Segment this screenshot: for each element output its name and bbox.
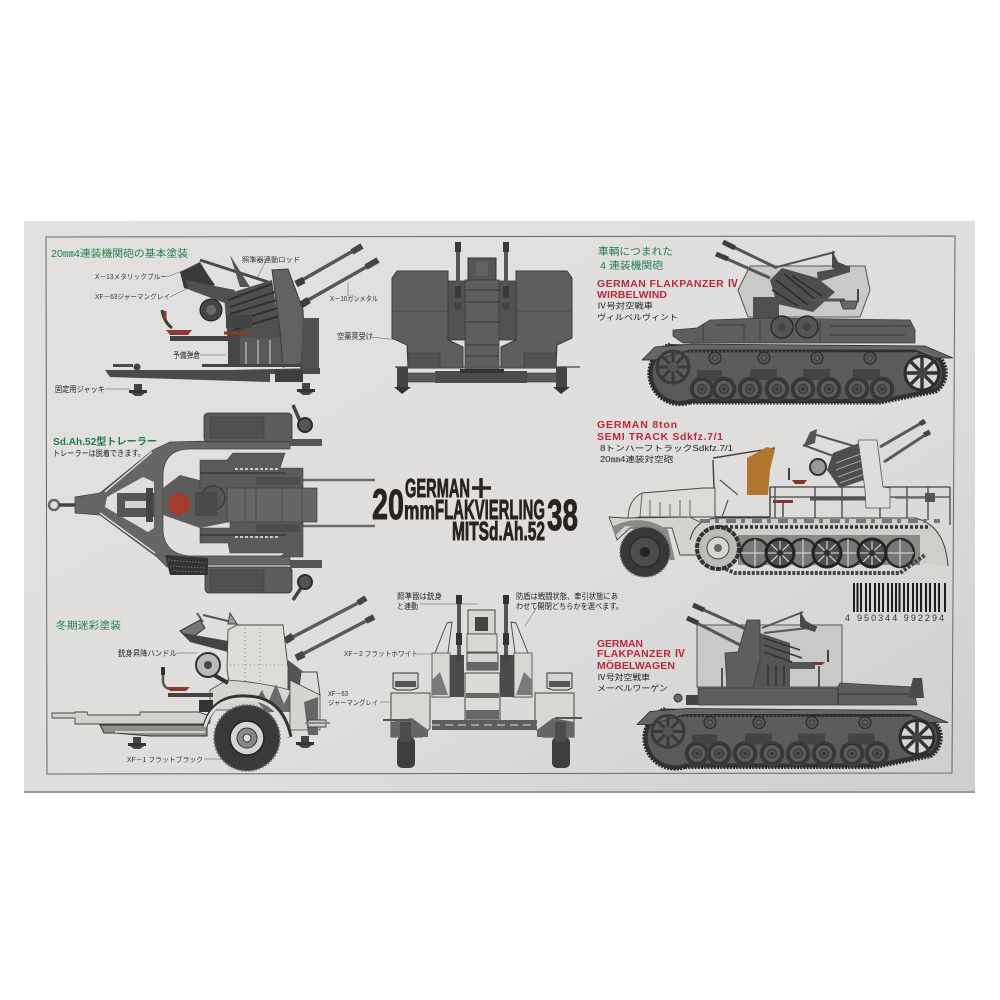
flak side view, basic colours (105, 246, 378, 396)
panel bottom shadow (24, 791, 975, 793)
main title: MITSd.Ah.52 (452, 516, 545, 546)
label: semi track name (597, 419, 723, 443)
label: Möbelwagen name: GERMAN (597, 638, 643, 650)
leader lines, side view (105, 261, 400, 389)
trailer top view (49, 405, 375, 600)
label: Wirbelwind Japanese name: Ⅳ号対空戦車 (597, 300, 653, 310)
label: sight rod: 照準器連動ロッド (242, 255, 300, 264)
label: shield note: 防盾は戦闘状態、牽引状態にあ (516, 591, 618, 601)
8 ton semi track (609, 421, 950, 577)
label: semi track Japanese name (600, 444, 734, 464)
label: Wirbelwind Japanese heading: 車輌につまれた (598, 245, 673, 258)
label: winter heading: 冬期迷彩塗装 (56, 619, 121, 632)
label: XF-2: XF－2 フラットホワイト (344, 650, 418, 658)
winter gun side view (52, 598, 374, 771)
label: spare magazines: 予備弾倉 (173, 350, 200, 360)
label: fixing jack: 固定用ジャッキ (55, 385, 105, 394)
label: XF-63: XF－63ジャーマングレイ (95, 292, 170, 301)
label: Wirbelwind Japanese heading: 4 連装機関砲 (600, 259, 663, 272)
label: shell catcher: 空薬莢受け (337, 331, 373, 341)
label: semi track Japanese name: 8トンハーフトラックSdkfz.7/1 (600, 444, 734, 453)
main title: 20 (372, 481, 404, 529)
inner frame (46, 236, 955, 774)
background panel (24, 221, 975, 793)
label: XF-1: XF－1 フラットブラック (127, 755, 203, 764)
label: trailer note: トレーラーは脱着できます。 (53, 448, 145, 458)
label: Wirbelwind Japanese name (597, 300, 678, 322)
label: X-13: X－13メタリックブルー (95, 272, 167, 281)
label: elevation handle: 銃身昇降ハンドル (118, 648, 177, 658)
label: basic colour heading: 20㎜4連装機関砲の基本塗装 (51, 247, 188, 260)
label: Wirbelwind name: WIRBELWIND (597, 289, 667, 301)
label: XF-63 winter (328, 691, 378, 707)
label: Wirbelwind Japanese name: ヴィルベルヴィント (597, 312, 678, 322)
label: semi track Japanese name: 20㎜4連装対空砲 (600, 454, 673, 464)
label: Möbelwagen Japanese name: メーベルワーゲン (597, 683, 668, 693)
barcode: 4 (845, 613, 850, 623)
winter gun front view (383, 595, 582, 768)
Wirbelwind tank (642, 242, 953, 405)
main title: 38 (547, 491, 578, 540)
main title: mm (404, 497, 435, 525)
leader lines, winter views (177, 602, 540, 759)
label: XF-63 winter: ジャーマングレイ (328, 698, 378, 707)
label: XF-63 winter: XF－63 (328, 691, 348, 698)
label: trailer heading: Sd.Ah.52型トレーラー (53, 435, 157, 448)
label: shield note (516, 591, 623, 611)
barcode: 950344 992294 (857, 613, 944, 623)
label: sight note (397, 591, 442, 611)
main title (372, 473, 578, 546)
label: semi track name: SEMI TRACK Sdkfz.7/1 (597, 431, 723, 443)
label: Möbelwagen name: FLAKPANZER Ⅳ (597, 648, 686, 660)
label: X-10: X－10ガンメタル (330, 294, 378, 303)
label: sight note: と連動 (397, 601, 418, 611)
label: Möbelwagen name: MÖBELWAGEN (597, 659, 675, 672)
Möbelwagen tank (637, 605, 948, 769)
label: Möbelwagen Japanese name: Ⅳ号対空戦車 (597, 672, 650, 682)
main title: GERMAN (405, 473, 470, 503)
label: sight note: 照準器は銃身 (397, 591, 442, 601)
barcode (845, 583, 945, 623)
label: Möbelwagen name (597, 638, 686, 672)
flak front view (392, 242, 580, 394)
label: semi track name: GERMAN 8ton (597, 419, 677, 431)
label: Möbelwagen Japanese name (597, 672, 668, 693)
label: Wirbelwind name: GERMAN FLAKPANZER Ⅳ (597, 278, 738, 290)
label: shield note: わせて開閉どちらかを選べます。 (516, 601, 623, 611)
main title: FLAKVIERLING (435, 494, 545, 525)
label: Wirbelwind Japanese heading (598, 245, 673, 272)
label: Wirbelwind name (597, 278, 738, 301)
